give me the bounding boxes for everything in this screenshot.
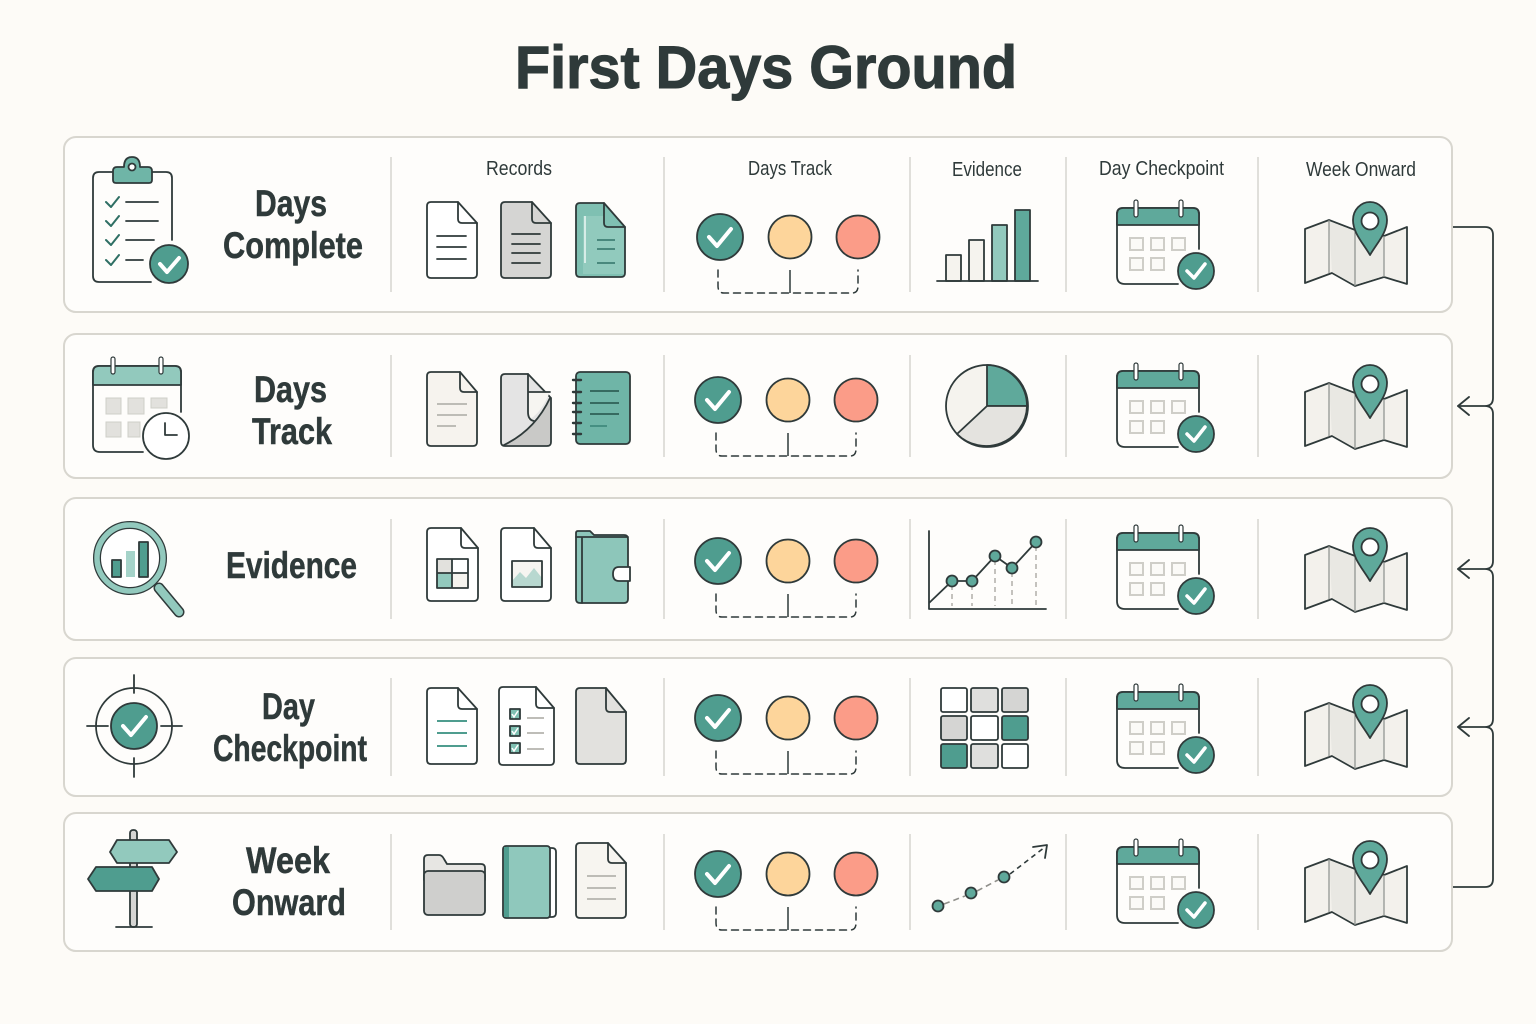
heatmap grid — [941, 688, 1028, 768]
status dots — [697, 214, 880, 293]
icon: spiral notebook — [573, 372, 630, 444]
icon: folder — [424, 855, 485, 915]
column label: Records: Records — [486, 158, 552, 180]
icon: teal document — [576, 203, 625, 277]
heading: Days Track: Days — [254, 369, 327, 410]
icon: calendar with clock — [93, 357, 189, 459]
icon: signpost — [88, 830, 177, 927]
heading: Days Complete: Days — [255, 183, 327, 224]
icon: map with pin — [1305, 202, 1407, 286]
pie chart — [946, 365, 1028, 447]
icon: map with pin — [1305, 528, 1407, 612]
icon: grey lined document — [501, 202, 551, 278]
panel: Days Complete row — [64, 137, 1452, 312]
heading: Days Track — [252, 369, 332, 452]
panel: Days Track row — [64, 334, 1452, 478]
icon: curled page document — [501, 374, 551, 446]
heading: Day Checkpoint: Checkpoint — [213, 728, 367, 769]
icon: calendar with check — [1117, 363, 1214, 452]
icon: magnifier with bars — [97, 525, 179, 612]
panel: Week Onward row — [64, 813, 1452, 951]
column label: Days Track: Days Track — [748, 158, 833, 180]
icon: table document — [427, 528, 478, 601]
icon: calendar with check — [1117, 839, 1214, 928]
heading: Evidence: Evidence — [226, 545, 357, 586]
column label: Day Checkpoint: Day Checkpoint — [1099, 158, 1224, 180]
icon: grey blank document — [576, 688, 626, 764]
flow connector with arrows between rows — [1453, 227, 1493, 887]
icon: white lined document — [427, 202, 477, 278]
icon: image document — [501, 528, 551, 601]
heading: Days Complete — [223, 183, 363, 266]
status dots — [695, 538, 878, 617]
status dots — [695, 851, 878, 930]
icon: teal lined document — [427, 688, 477, 764]
heading: Day Checkpoint: Day — [262, 686, 315, 727]
icon: calendar with check — [1117, 200, 1214, 289]
icon: map with pin — [1305, 841, 1407, 925]
column label: Week Onward: Week Onward — [1306, 159, 1416, 181]
icon: cream lined document — [576, 843, 626, 918]
icon: clipboard with check — [93, 157, 188, 283]
line chart — [929, 531, 1046, 609]
panel: Day Checkpoint row — [64, 658, 1452, 796]
status dots — [695, 695, 878, 774]
icon: calendar with check — [1117, 525, 1214, 614]
icon: checklist document — [499, 687, 554, 765]
icon: cream document — [427, 372, 477, 446]
icon: map with pin — [1305, 685, 1407, 769]
heading: Week Onward: Week — [246, 840, 330, 881]
column label: Evidence: Evidence — [952, 159, 1022, 181]
heading: Day Checkpoint — [213, 686, 367, 769]
heading: Week Onward — [232, 840, 346, 923]
bar chart — [937, 210, 1038, 281]
panel: Evidence row — [64, 498, 1452, 640]
icon: calendar with check — [1117, 684, 1214, 773]
icon: teal notebook — [503, 846, 556, 918]
heading: Days Track: Track — [252, 411, 332, 452]
icon: target with check — [87, 675, 182, 777]
heading: Week Onward: Onward — [232, 882, 346, 923]
title: First Days Ground — [515, 34, 1017, 101]
heading: Days Complete: Complete — [223, 225, 363, 266]
trend arrow with points — [932, 845, 1047, 912]
icon: map with pin — [1305, 365, 1407, 449]
status dots — [695, 377, 878, 456]
icon: teal folder wallet — [576, 531, 630, 603]
